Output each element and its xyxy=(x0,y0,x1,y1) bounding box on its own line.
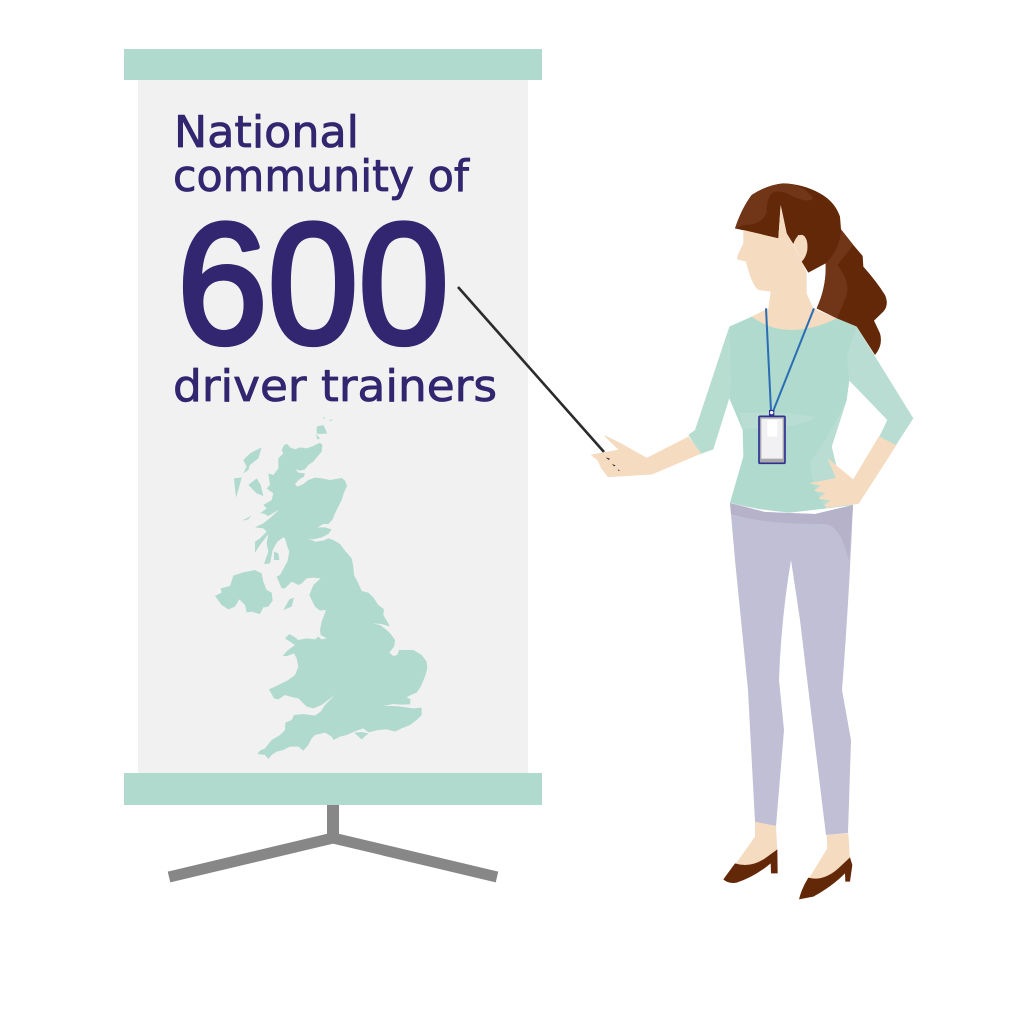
ID badge xyxy=(759,410,785,463)
lanyard xyxy=(766,308,814,411)
Northern Ireland xyxy=(215,570,273,614)
right shoe xyxy=(799,857,852,899)
feet and shoes xyxy=(723,822,852,899)
UK map xyxy=(215,417,427,759)
shirt sleeve left xyxy=(688,327,732,454)
stand base xyxy=(169,805,497,877)
shirt sleeve right xyxy=(847,327,913,445)
woman presenter xyxy=(592,183,913,899)
trousers xyxy=(730,503,853,835)
left arm and hand xyxy=(592,436,701,477)
heading line: community of: community of xyxy=(173,151,470,202)
Great Britain xyxy=(255,443,427,759)
upper body xyxy=(688,183,913,513)
face and neck xyxy=(737,205,837,330)
shirt waist shading xyxy=(810,400,853,507)
pointer stick xyxy=(458,287,604,452)
Scottish islands xyxy=(234,417,333,560)
hair highlight xyxy=(735,183,853,318)
big number 600: 600 xyxy=(177,188,449,380)
right foot xyxy=(808,833,850,881)
banner top bar xyxy=(124,49,542,80)
subheading: driver trainers: driver trainers xyxy=(173,361,497,412)
Isle of Wight xyxy=(354,732,368,739)
finger marks xyxy=(606,457,620,471)
ear xyxy=(793,235,807,262)
heading line: National: National xyxy=(174,107,359,158)
shirt chest shading xyxy=(739,412,817,429)
banner panel xyxy=(138,80,528,773)
right arm and hand xyxy=(811,437,896,507)
Isle of Man xyxy=(283,598,294,610)
hair xyxy=(735,183,887,355)
roller banner stand xyxy=(124,49,542,877)
banner bottom bar xyxy=(124,773,542,805)
left foot xyxy=(735,822,777,868)
left shoe xyxy=(723,849,778,883)
shirt body xyxy=(729,317,857,513)
